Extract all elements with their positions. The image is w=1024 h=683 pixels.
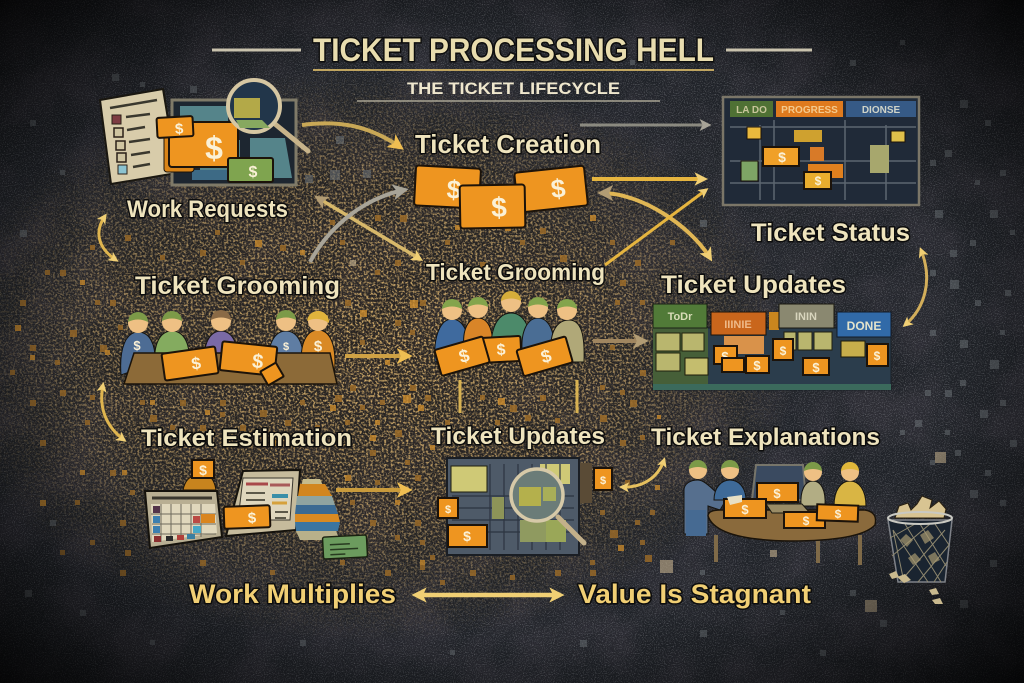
icon: three tickets: $ [549,173,567,204]
panel: ticket updates right [653,271,891,390]
icon: group holding tickets [434,291,584,376]
arrow: grooming to creation [310,190,404,262]
icon: kanban board: LA DO [736,105,767,116]
icon: coloured board: ToDr [668,311,693,323]
icon: board behind tickets [172,100,296,185]
label: Ticket Creation [415,129,601,159]
icon: board with magnifier: $ [463,528,471,544]
label: work multiplies: Work Multiplies [189,579,396,609]
icon: board with magnifier [438,458,612,555]
subtitle: THE TICKET LIFECYCLE [407,79,620,98]
icon: calendar [145,491,222,548]
icon: people at table: $ [283,341,289,353]
icon: kanban board: $ [815,174,822,188]
icon: kanban board: PROGRESS [781,105,838,116]
icon: kanban board [723,97,919,205]
icon: checklist paper [100,89,177,184]
icon: kanban board: $ [778,149,786,165]
icon: group holding tickets: $ [539,345,554,367]
icon: small ticket on briefcase: $ [199,462,207,478]
arrow: grooming and estimation loop [102,385,124,440]
icon: three tickets: $ [446,174,462,205]
icon: small ticket on briefcase [183,460,216,490]
title text: TICKET PROCESSING HELL [313,32,714,68]
label: value is stagnant: Value Is Stagnant [578,579,811,609]
arrow: grooming to status [605,190,706,265]
icon: group holding tickets: $ [457,345,472,367]
icon: people at table: $ [133,338,141,353]
label: Ticket Updates [661,271,846,299]
arrow: requests to creation [302,123,400,147]
label: Ticket Grooming [426,259,605,285]
icon: document and stack [224,470,368,559]
icon: three tickets [414,165,588,229]
icon: people at table: $ [190,354,203,374]
icon: team at round table: $ [741,502,749,517]
panel: ticket grooming center [426,259,605,376]
icon: coloured board: DONE [847,319,881,333]
icon: wastebasket [888,496,952,604]
label: Ticket Explanations [651,424,880,451]
arrow: requests to grooming [318,198,420,259]
subtitle rule [357,100,660,102]
icon: tickets: $ [249,164,258,181]
panel: ticket updates center [431,423,612,555]
panel: ticket grooming left [121,272,340,385]
icon: magnifier [228,80,308,151]
icon: board with magnifier: $ [445,504,451,516]
arrow: estimation to updates [336,488,408,492]
arrow: double headed [416,593,560,597]
panel: ticket explanations [651,424,880,565]
icon: team at round table: $ [834,507,842,521]
icon: three tickets: $ [491,192,508,223]
panel: ticket status [723,97,919,247]
icon: kanban board: DIONSE [862,105,900,116]
icon: magnifier [511,469,584,543]
panel: work requests [100,80,308,223]
arrow: requests and grooming loop [99,216,116,260]
arrow: grooming to updates [593,339,644,343]
icon: people at table: $ [314,338,323,355]
icon: coloured board: IIINIE [724,319,752,331]
panel: ticket estimation [141,425,368,559]
icon: coloured board [653,304,891,390]
icon: tickets: $ [175,121,184,138]
icon: team at round table: $ [773,486,781,501]
icon: coloured board: $ [721,349,729,364]
icon: coloured board: $ [753,358,761,373]
label: Ticket Status [751,219,910,247]
arrow: explanations loop [622,460,664,487]
icon: board with magnifier: $ [600,475,606,487]
arrow: status and updates loop [905,250,927,325]
icon: tickets: $ [205,130,223,166]
icon: people at table [121,310,337,385]
label: Ticket Updates [431,423,605,450]
icon: team at round table: $ [803,514,810,528]
icon: coloured board: $ [780,344,787,358]
arrow: requests to status [580,124,708,126]
icon: group holding tickets: $ [496,342,506,359]
icon: coloured board: ININ [795,311,817,323]
arrow: vertical connectors [460,380,577,413]
title block [212,32,812,101]
icon: team at round table [684,460,876,565]
arrow: creation to status [592,177,704,181]
label: Work Requests [127,196,288,223]
icon: coloured board: $ [812,360,820,375]
arrow: creation to updates [602,193,710,258]
title rule [212,50,812,70]
label: Ticket Estimation [141,425,352,452]
icon: tickets [157,116,273,182]
arrow: grooming to grooming [345,354,408,358]
icon: document and stack: $ [248,510,257,527]
panel: ticket creation [414,129,601,229]
label: Ticket Grooming [135,272,340,300]
icon: coloured board: $ [874,349,881,363]
icon: people at table: $ [251,351,264,374]
